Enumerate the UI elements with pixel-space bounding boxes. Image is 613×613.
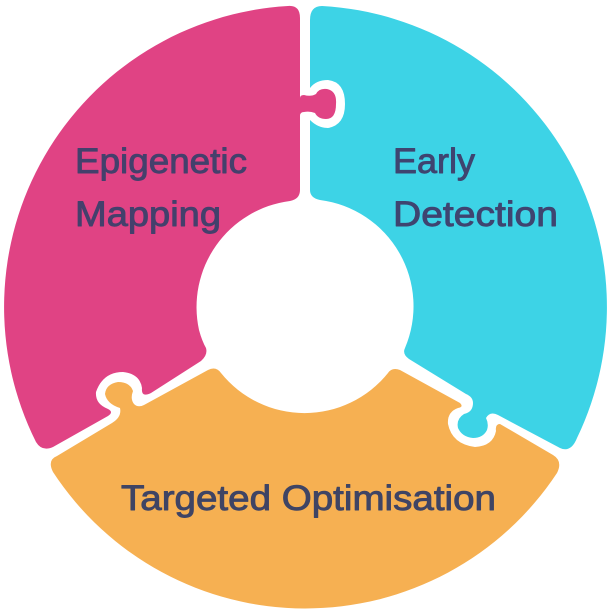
panel: epigenetic mapping piece	[4, 6, 336, 449]
heading: epigenetic mapping: Mapping	[75, 195, 221, 234]
heading: early detection: Early	[393, 142, 476, 181]
heading: epigenetic mapping	[75, 142, 247, 234]
heading: early detection	[393, 142, 558, 234]
heading: epigenetic mapping: Epigenetic	[75, 142, 247, 181]
heading: targeted optimisation: Targeted Optimisation	[121, 479, 496, 518]
panel: early detection piece	[310, 6, 607, 449]
panel: targeted optimisation piece	[51, 369, 559, 608]
heading: early detection: Detection	[393, 195, 558, 234]
